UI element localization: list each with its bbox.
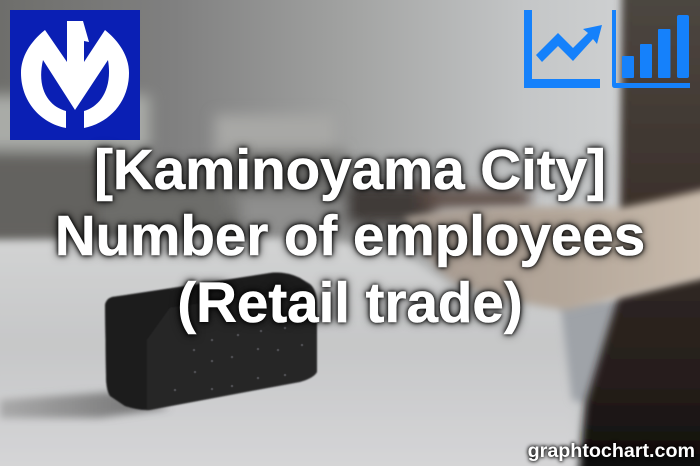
grey gap under arm	[560, 300, 622, 405]
speaker shadow	[0, 392, 170, 418]
speaker	[105, 273, 317, 410]
watermark: graphtochart.com	[528, 440, 695, 462]
desk	[0, 238, 580, 466]
icon: bar chart	[612, 10, 690, 88]
hand	[404, 188, 700, 310]
title	[50, 138, 650, 341]
title: (Retail trade)	[177, 271, 523, 334]
wall shading	[0, 95, 530, 240]
dark right side	[620, 0, 700, 215]
title: Number of employees	[55, 204, 645, 267]
title: [Kaminoyama City]	[94, 138, 606, 201]
icon: line chart	[524, 10, 602, 88]
